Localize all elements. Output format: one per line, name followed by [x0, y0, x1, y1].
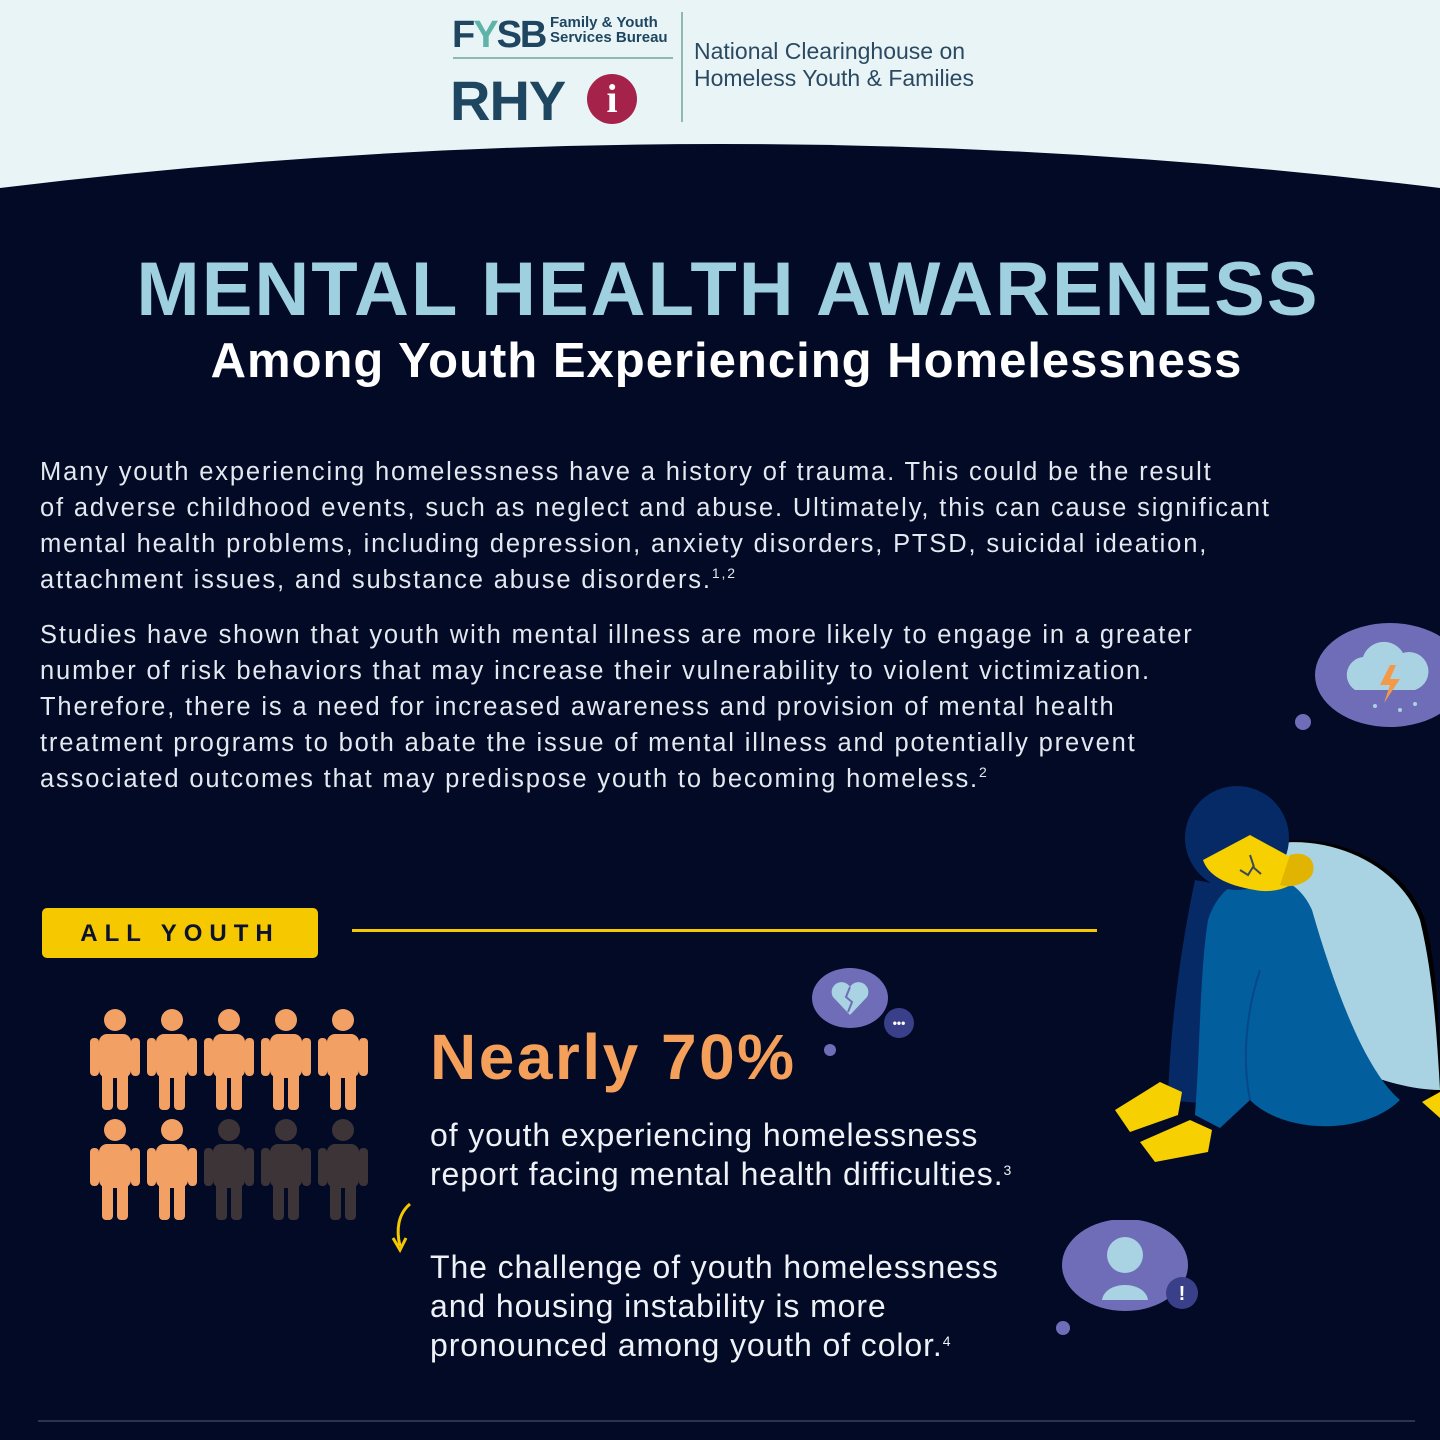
intro paragraph 1: of adverse childhood events, such as neglect and abuse. Ultimately, this can cause significant: [40, 494, 1271, 522]
header logo: RHY: [450, 69, 565, 132]
intro paragraph 1: Many youth experiencing homelessness have a history of trauma. This could be the result: [40, 458, 1213, 486]
intro paragraph 1: mental health problems, including depression, anxiety disorders, PTSD, suicidal ideation,: [40, 530, 1208, 558]
intro paragraph 2: Therefore, there is a need for increased awareness and provision of mental health: [40, 693, 1115, 721]
header logo: [450, 12, 974, 132]
intro paragraph 2: [40, 621, 1194, 793]
header logo: National Clearinghouse on: [694, 38, 965, 64]
intro paragraph 2: associated outcomes that may predispose youth to becoming homeless.2: [40, 764, 989, 793]
icon: storm thought bubble: [1295, 623, 1440, 730]
header logo: FYSB: [452, 14, 545, 56]
badge: ALL YOUTH: ALL YOUTH: [80, 920, 280, 947]
header logo: Family & Youth: [550, 14, 658, 31]
badge: ALL YOUTH: [42, 908, 318, 958]
stat description: of youth experiencing homelessness: [430, 1117, 978, 1153]
divider line yellow: [352, 929, 1097, 932]
icon: heartbreak bubble: [812, 968, 914, 1056]
intro paragraph 1: [40, 458, 1271, 594]
title: MENTAL HEALTH AWARENESS: [136, 247, 1320, 332]
icon: person alert bubble: !: [1179, 1283, 1185, 1305]
text: youth of color: pronounced among youth of color.4: [430, 1327, 951, 1363]
illustration: sad youth sitting: [1115, 786, 1440, 1162]
stat headline: Nearly 70%: [430, 1021, 797, 1093]
header logo: Homeless Youth & Families: [694, 65, 974, 91]
subtitle: Among Youth Experiencing Homelessness: [211, 334, 1242, 388]
arrow: [392, 1202, 411, 1253]
header logo: i: [606, 76, 618, 121]
icon: heartbreak bubble: •••: [893, 1016, 905, 1030]
text: youth of color: The challenge of youth homelessness: [430, 1249, 999, 1285]
header logo: Services Bureau: [550, 29, 668, 46]
intro paragraph 2: treatment programs to both abate the issue of mental illness and potentially prevent: [40, 729, 1137, 757]
stat description: [430, 1117, 1012, 1192]
text: youth of color: and housing instability is more: [430, 1288, 887, 1324]
stat description: report facing mental health difficulties.3: [430, 1156, 1012, 1192]
intro paragraph 1: attachment issues, and substance abuse disorders.1,2: [40, 565, 737, 594]
icon: person alert bubble: [1056, 1220, 1198, 1335]
icon grid: 7 of 10 people: [90, 1009, 368, 1220]
intro paragraph 2: Studies have shown that youth with mental illness are more likely to engage in a greater: [40, 621, 1194, 649]
text: youth of color: [430, 1249, 999, 1363]
intro paragraph 2: number of risk behaviors that may increase their vulnerability to violent victimization.: [40, 657, 1151, 685]
